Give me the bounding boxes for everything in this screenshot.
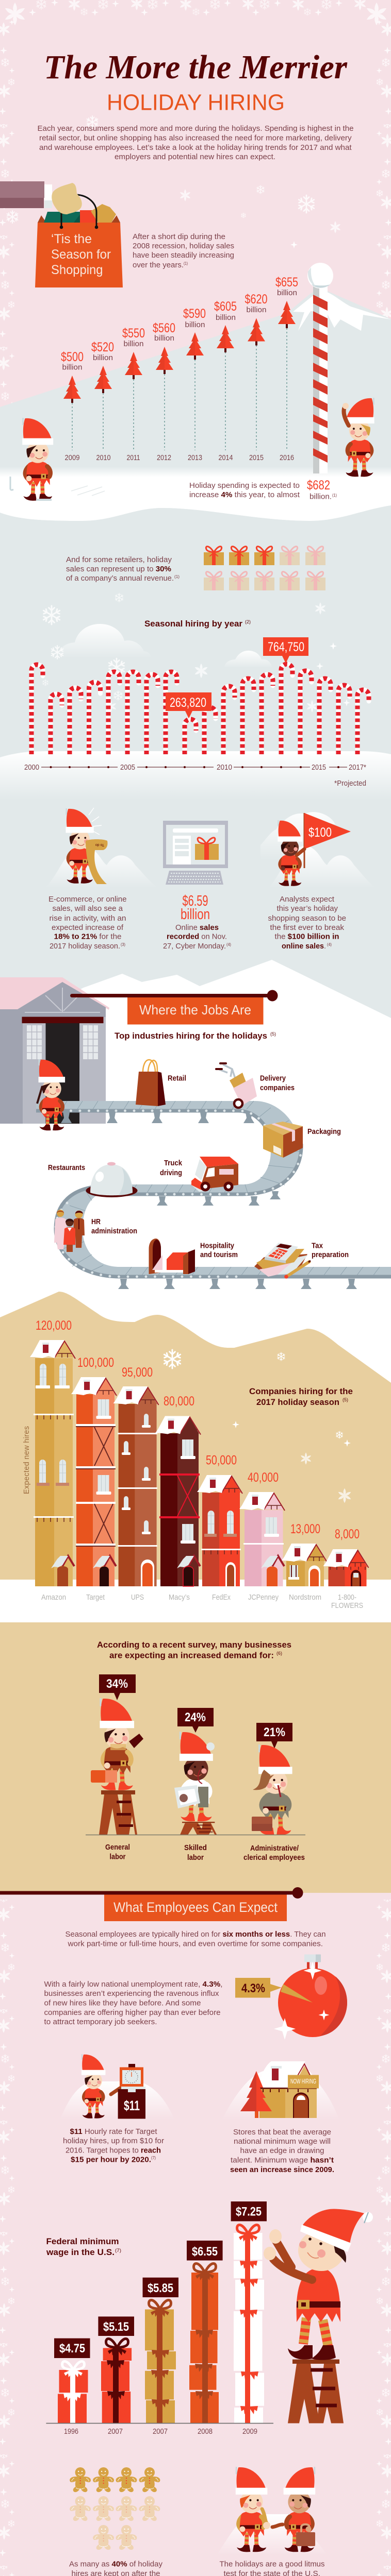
- callout: 21%: [256, 1723, 292, 1749]
- label: truck driving: [160, 1159, 183, 1177]
- values: $590: [183, 307, 206, 321]
- values: $620: [245, 292, 267, 307]
- chart: ornament 4.3%: [235, 1955, 347, 2040]
- icon: hand with shopping bag: ‘Tis the: [51, 232, 92, 246]
- white mountains: [0, 960, 391, 1391]
- timeline axis: 2000: [24, 764, 39, 772]
- callout: 764,750: 764,750: [268, 640, 304, 654]
- text: expected 2017 spending: $682: [307, 478, 330, 493]
- icon: retail bag: [136, 1060, 166, 1106]
- label: tax preparation: [312, 1242, 349, 1259]
- year axis: 2009: [65, 454, 79, 462]
- heading: companies hiring: (5): [343, 1397, 348, 1402]
- conveyor belt: [36, 1101, 391, 1289]
- text: seasonal employee intro: [65, 1930, 326, 1948]
- text: cyber monday stat: 27, Cyber Monday.: [163, 942, 226, 951]
- heading: survey: [97, 1640, 291, 1660]
- icon: HR people: [54, 1210, 85, 1252]
- company labels: JCPenney: [248, 1593, 279, 1602]
- icon grid: gifts showing 30%: [204, 547, 325, 590]
- icon: worker elf at door: [37, 1059, 65, 1130]
- background: beige survey panel: [0, 1622, 391, 1893]
- label: packaging: Packaging: [307, 1127, 341, 1136]
- value: Nordstrom: 13,000: [290, 1522, 320, 1536]
- labels: labor types: Administrative/: [250, 1844, 299, 1853]
- text: retailers revenue share: (1): [174, 574, 180, 579]
- text: litmus test: The holidays are a good litmus: [220, 2560, 325, 2569]
- text: e-commerce stat: E-commerce, or online: [48, 895, 127, 904]
- heading: survey: According to a recent survey, many businesses: [97, 1640, 291, 1650]
- chart: UPS house: [113, 1386, 159, 1586]
- chart: Target house: [71, 1377, 117, 1586]
- label: hospitality and tourism: Hospitality: [200, 1242, 235, 1250]
- year labels: 2007: [153, 2428, 168, 2436]
- clouds: [59, 624, 272, 667]
- icon: hand with shopping bag: Shopping: [51, 263, 103, 277]
- icon: skating elf: [10, 418, 105, 501]
- year axis: 2016: [280, 454, 294, 462]
- text: recession note: 2008 recession, holiday sales: [133, 242, 234, 250]
- company labels: Target: [86, 1593, 105, 1602]
- values: $605: [214, 299, 237, 314]
- text: unemployment: companies are offering higher pay than ever before: [44, 2008, 221, 2017]
- label: truck driving: driving: [160, 1168, 182, 1177]
- wage labels: $6.55: [192, 2245, 218, 2259]
- year labels: [64, 2428, 257, 2436]
- snowflake border: right, lower: [372, 1900, 391, 2576]
- heading: seasonal hiring by year: Seasonal hiring by year: [144, 619, 242, 629]
- values: billion: [154, 334, 174, 343]
- year labels: 1996: [64, 2428, 78, 2436]
- text: expected 2017 spending: increase 4% this year, to almost: [189, 490, 300, 499]
- text: retailers revenue share: of a company’s annual revenue.: [66, 574, 174, 583]
- label: HR administration: [91, 1217, 137, 1235]
- text: minimum wage note: seen an increase since 2009.: [230, 2165, 334, 2174]
- icon: elf at time clock: [60, 2054, 174, 2120]
- text: expected 2017 spending: (1): [332, 493, 337, 498]
- heading: companies hiring: [249, 1386, 353, 1407]
- year axis: 2013: [188, 454, 202, 462]
- text: e-commerce stat: (3): [121, 942, 125, 947]
- icon: elves shaking hands: [217, 2467, 328, 2555]
- background: pink sky: [0, 0, 391, 412]
- chart: FedEx house: [197, 1475, 242, 1586]
- callout: 263,820: 263,820: [170, 696, 206, 710]
- icon group: gingerbread cookies 40%: [70, 2467, 160, 2550]
- text: analysts stat: shopping season to be: [268, 914, 346, 923]
- label: retail: Retail: [168, 1074, 186, 1083]
- timeline axis: 2005: [120, 764, 135, 772]
- company labels: UPS: [131, 1593, 144, 1602]
- chart: Macy's house: [155, 1416, 201, 1586]
- icon: now hiring store: [222, 2061, 339, 2120]
- text: minimum wage note: Stores that beat the average: [233, 2128, 331, 2137]
- text: Target wage: holiday hires, up from $10 for: [63, 2137, 164, 2145]
- intro paragraph: Each year, consumers spend more and more during the holidays. Spending is highest in the: [37, 124, 354, 133]
- labels: labor types: labor: [187, 1853, 204, 1862]
- snow mound under canes: [0, 751, 391, 800]
- value: FedEx: 50,000: [206, 1453, 237, 1467]
- value: JCPenney: 40,000: [248, 1470, 279, 1485]
- timeline axis: *Projected: [334, 779, 366, 788]
- timeline axis: 2015: [312, 764, 326, 772]
- text: analysts stat: the first ever to break: [270, 923, 344, 932]
- intro paragraph: employers and potential new hires can expect.: [115, 152, 275, 161]
- wage labels: $5.15: [103, 2320, 129, 2334]
- text: analysts stat: the $100 billion in: [274, 933, 339, 941]
- icon: elf with list: To do: [95, 843, 104, 846]
- text: litmus test: [219, 2560, 325, 2576]
- background: beige hills: [0, 1292, 391, 1581]
- callout: 24%: [177, 1708, 214, 1733]
- icon: hand with shopping bag: [0, 181, 123, 287]
- title: The More the Merrier: [44, 48, 348, 86]
- bar: 2009: [234, 2225, 264, 2424]
- wage labels: $5.85: [148, 2281, 173, 2295]
- label: delivery companies: Delivery: [260, 1074, 286, 1083]
- label: HR administration: administration: [91, 1227, 137, 1235]
- icon: packaged box: [263, 1122, 303, 1158]
- mountain snow cap: [293, 291, 391, 331]
- heading: federal minimum wage: wage in the U.S.: [46, 2247, 115, 2257]
- callout: 764,750: [263, 637, 308, 664]
- values: $520: [91, 340, 114, 354]
- ground snow band: [0, 477, 391, 521]
- label: HR administration: HR: [91, 1217, 101, 1226]
- section background: pale grey: [0, 505, 391, 1025]
- company labels: FedEx: [212, 1593, 231, 1602]
- background: pale mountain: [0, 290, 391, 536]
- baseline: [46, 2423, 273, 2424]
- icon: now hiring store: NOW HIRING: [290, 2077, 316, 2085]
- text: e-commerce stat: rise in activity, with an: [50, 914, 126, 923]
- year labels: 2008: [198, 2428, 213, 2436]
- values: billion: [185, 321, 205, 329]
- callout: 21%: 21%: [264, 1725, 285, 1739]
- text: cyber monday stat: recorded on Nov.: [167, 933, 227, 941]
- text: minimum wage note: have an edge in drawing: [240, 2146, 324, 2155]
- text: Target wage: $11 Hourly rate for Target: [70, 2127, 157, 2136]
- icon: elf with $100 flag: [260, 812, 376, 888]
- chart: federal minimum wage gift stacks: [46, 2201, 273, 2436]
- year labels: 2009: [242, 2428, 257, 2436]
- text: e-commerce stat: 18% to 21% for the: [54, 933, 122, 941]
- label: truck driving: Truck: [164, 1159, 183, 1167]
- text: Target wage: [63, 2127, 164, 2164]
- text: seasonal employee intro: Seasonal employees are typically hired on for six months or less. They can: [65, 1930, 326, 1939]
- text: analysts stat: this year’s holiday: [276, 904, 338, 913]
- chart: candy cane bars: [31, 664, 369, 754]
- company labels: [41, 1593, 363, 1610]
- timeline axis: [24, 764, 366, 788]
- year axis: 2010: [96, 454, 110, 462]
- heading: companies hiring: Companies hiring for the: [249, 1386, 353, 1396]
- timeline axis: 2017*: [349, 764, 366, 772]
- value: Macy's: 80,000: [164, 1394, 194, 1409]
- elf: administrative: [252, 1744, 292, 1835]
- text: unemployment: [44, 1980, 223, 2026]
- labels: labor types: Skilled: [184, 1843, 207, 1852]
- year axis: 2012: [157, 454, 171, 462]
- wage labels: $4.75: [59, 2342, 85, 2355]
- wage labels: $7.25: [236, 2205, 262, 2219]
- values: billion: [124, 340, 143, 348]
- icon: warehouse: [0, 977, 109, 1124]
- text: cyber monday stat: (4): [226, 942, 231, 947]
- label: tax preparation: Tax: [312, 1242, 323, 1250]
- text: recession note: [133, 232, 234, 269]
- timeline axis: 2010: [217, 764, 232, 772]
- tree markers: [63, 301, 296, 403]
- snow ground band under houses: [0, 1580, 391, 1622]
- label: delivery companies: [260, 1074, 295, 1092]
- company labels: Nordstrom: [289, 1593, 321, 1602]
- chart: ornament 4.3%: 4.3%: [241, 1981, 265, 1995]
- bar: 2007 first: [101, 2338, 132, 2424]
- icon: hand truck with boxes: [216, 1063, 257, 1108]
- value: 1-800-Flowers: 8,000: [335, 1527, 360, 1541]
- sign: what employees can expect: What Employees Can Expect: [113, 1900, 278, 1915]
- chart: JCPenney house: [239, 1492, 285, 1586]
- text: retailers revenue share: [66, 555, 180, 583]
- scattered snowflakes near intro: [7, 116, 341, 248]
- icon: elf with $100 flag: $100: [308, 825, 332, 840]
- intro paragraph: retail sector, but online shopping has also increased the need for more marketing, delivery: [39, 134, 352, 142]
- text: unemployment: of new hires like they have before. And some: [44, 1999, 201, 2007]
- text: expected 2017 spending: billion.: [309, 493, 332, 501]
- label: delivery companies: companies: [260, 1083, 295, 1092]
- wage labels: [54, 2201, 267, 2358]
- snowflake border: right, upper: [372, 21, 391, 350]
- icon: elf looking up at pole: [343, 398, 374, 477]
- text: unemployment: to attract temporary job seekers.: [44, 2018, 157, 2026]
- company labels: Macy’s: [169, 1593, 190, 1602]
- value: UPS: 95,000: [122, 1365, 153, 1380]
- company labels: FLOWERS: [331, 1601, 363, 1610]
- text: permanent hires: [69, 2560, 163, 2576]
- text: minimum wage note: [230, 2128, 334, 2174]
- y axis label: Expected new hires: [23, 1426, 31, 1494]
- sign: where the jobs are: Where the Jobs Are: [139, 1002, 251, 1018]
- heading: survey: are expecting an increased demand for:: [109, 1651, 274, 1660]
- values: billion: [62, 364, 83, 372]
- text: expected 2017 spending: [189, 478, 337, 501]
- elf: general labor: [91, 1698, 143, 1835]
- text: retailers revenue share: sales can represent up to 30%: [66, 565, 171, 573]
- text: cyber monday stat: Online sales: [175, 923, 219, 932]
- text: Target wage: 2016. Target hopes to reach: [66, 2146, 161, 2155]
- labels: labor types: clerical employees: [243, 1853, 305, 1862]
- scattered snow on beige: [164, 1350, 352, 1503]
- text: cyber monday stat: [163, 893, 231, 951]
- scattered snow, hiring chart: [43, 594, 350, 713]
- text: analysts stat: Analysts expect: [280, 895, 335, 904]
- subtitle: HOLIDAY HIRING: [107, 90, 285, 115]
- heading: federal minimum wage: Federal minimum: [46, 2236, 119, 2246]
- label: hospitality and tourism: and tourism: [200, 1250, 238, 1259]
- icon: elf at time clock: $11: [124, 2098, 140, 2113]
- text: recession note: (1): [184, 261, 188, 266]
- heading: federal minimum wage: (7): [115, 2248, 121, 2253]
- year labels: 2007: [108, 2428, 123, 2436]
- bar: 1996: [58, 2361, 88, 2424]
- value: Target: 100,000: [77, 1355, 114, 1370]
- company labels: 1-800-: [338, 1593, 356, 1602]
- snowflake border: left, upper: [0, 21, 19, 412]
- year axis: 2011: [127, 454, 140, 462]
- bar: 2007 second: [145, 2300, 176, 2424]
- text: cyber monday stat: $6.59: [183, 893, 208, 909]
- heading: seasonal hiring by year: (2): [245, 619, 251, 624]
- text: permanent hires: As many as 40% of holiday: [69, 2560, 162, 2569]
- callout: 34%: [99, 1674, 136, 1700]
- text: expected 2017 spending: Holiday spending is expected to: [189, 481, 300, 490]
- year axis: [65, 454, 294, 462]
- values: [61, 275, 298, 372]
- chart: holiday spending trees: [61, 275, 298, 462]
- values: billion: [247, 306, 266, 314]
- background: pink lower section: [0, 1893, 391, 2576]
- text: minimum wage note: talent. Minimum wage hasn’t: [231, 2156, 334, 2165]
- labels: labor types: General: [105, 1843, 130, 1852]
- icon: tax calculator and books: [254, 1243, 311, 1279]
- icon: north pole: [307, 263, 333, 473]
- chart: 1-800-Flowers house: [323, 1549, 368, 1586]
- bar: 2008: [189, 2263, 219, 2424]
- text: Target wage: $15 per hour by 2020.: [71, 2156, 151, 2164]
- ground line: [86, 1834, 305, 1835]
- callout: 34%: 34%: [106, 1677, 128, 1691]
- icon: computer with gift: [163, 821, 228, 885]
- text: analysts stat: (4): [327, 942, 332, 947]
- text: unemployment: With a fairly low national unemployment rate, 4.3%,: [44, 1980, 223, 1989]
- labels: labor types: [105, 1843, 305, 1862]
- text: Target wage: (7): [151, 2156, 156, 2160]
- sign: what employees can expect: [0, 1887, 303, 1921]
- snowflake border: left, lower: [0, 1900, 19, 2576]
- icon: hotel bed: [149, 1239, 195, 1274]
- values: billion: [216, 314, 236, 322]
- values: $550: [122, 326, 145, 341]
- sign: where the jobs are: [70, 990, 278, 1024]
- callout: 24%: 24%: [185, 1710, 206, 1724]
- label: restaurants: Restaurants: [48, 1163, 85, 1172]
- text: recession note: have been steadily increasing: [133, 251, 234, 260]
- icon: serving cloche: [86, 1162, 137, 1197]
- text: minimum wage note: national minimum wage will: [234, 2137, 331, 2146]
- icon: hand with shopping bag: Season for: [51, 247, 111, 262]
- text: e-commerce stat: 2017 holiday season.: [50, 942, 120, 951]
- values: billion: [93, 354, 113, 362]
- values: $655: [275, 275, 298, 290]
- values: $500: [61, 350, 84, 364]
- heading: top industries: Top industries hiring for the holidays: [115, 1031, 267, 1041]
- icon: elf with list: [45, 808, 158, 888]
- snowflake border: top: [4, 0, 387, 25]
- text: cyber monday stat: billion: [181, 906, 210, 923]
- text: analysts stat: [268, 895, 346, 951]
- text: recession note: over the years.: [133, 261, 184, 269]
- chart: Nordstrom house: [282, 1544, 327, 1586]
- year axis: 2015: [249, 454, 264, 462]
- value: Amazon: 120,000: [36, 1318, 72, 1333]
- label: hospitality and tourism: [200, 1242, 238, 1259]
- chart: Amazon house: [30, 1340, 75, 1586]
- text: e-commerce stat: sales, will also see a: [53, 904, 123, 913]
- heading: survey: (6): [276, 1651, 282, 1656]
- company labels: Amazon: [41, 1593, 66, 1602]
- heading: top industries: (5): [270, 1031, 276, 1037]
- year axis: 2014: [219, 454, 233, 462]
- text: e-commerce stat: [48, 895, 127, 951]
- labels: labor types: labor: [109, 1853, 126, 1861]
- text: recession note: After a short dip during the: [133, 232, 225, 241]
- text: retailers revenue share: And for some retailers, holiday: [66, 555, 172, 564]
- values: billion: [277, 289, 297, 297]
- text: e-commerce stat: expected increase of: [52, 923, 124, 932]
- heading: companies hiring: 2017 holiday season: [256, 1397, 339, 1407]
- text: unemployment: businesses aren’t experiencing the ravenous influx: [44, 1989, 219, 1998]
- label: tax preparation: preparation: [312, 1250, 349, 1259]
- text: seasonal employee intro: work part-time or full-time hours, and even overtime for some companies.: [67, 1939, 323, 1948]
- intro paragraph: [37, 124, 354, 161]
- icon: delivery truck: [191, 1157, 238, 1192]
- callout: 263,820: [166, 692, 211, 718]
- elf: skilled labor: [174, 1732, 217, 1835]
- text: analysts stat: online sales.: [282, 942, 326, 951]
- dashed year guides: [72, 328, 287, 450]
- intro paragraph: and warehouse employees. Let’s take a look at the holiday hiring trends for 2017 and what: [39, 143, 352, 152]
- heading: federal minimum wage: [46, 2236, 121, 2257]
- values: $560: [153, 321, 175, 335]
- icon: big elf on stool: [264, 2209, 373, 2424]
